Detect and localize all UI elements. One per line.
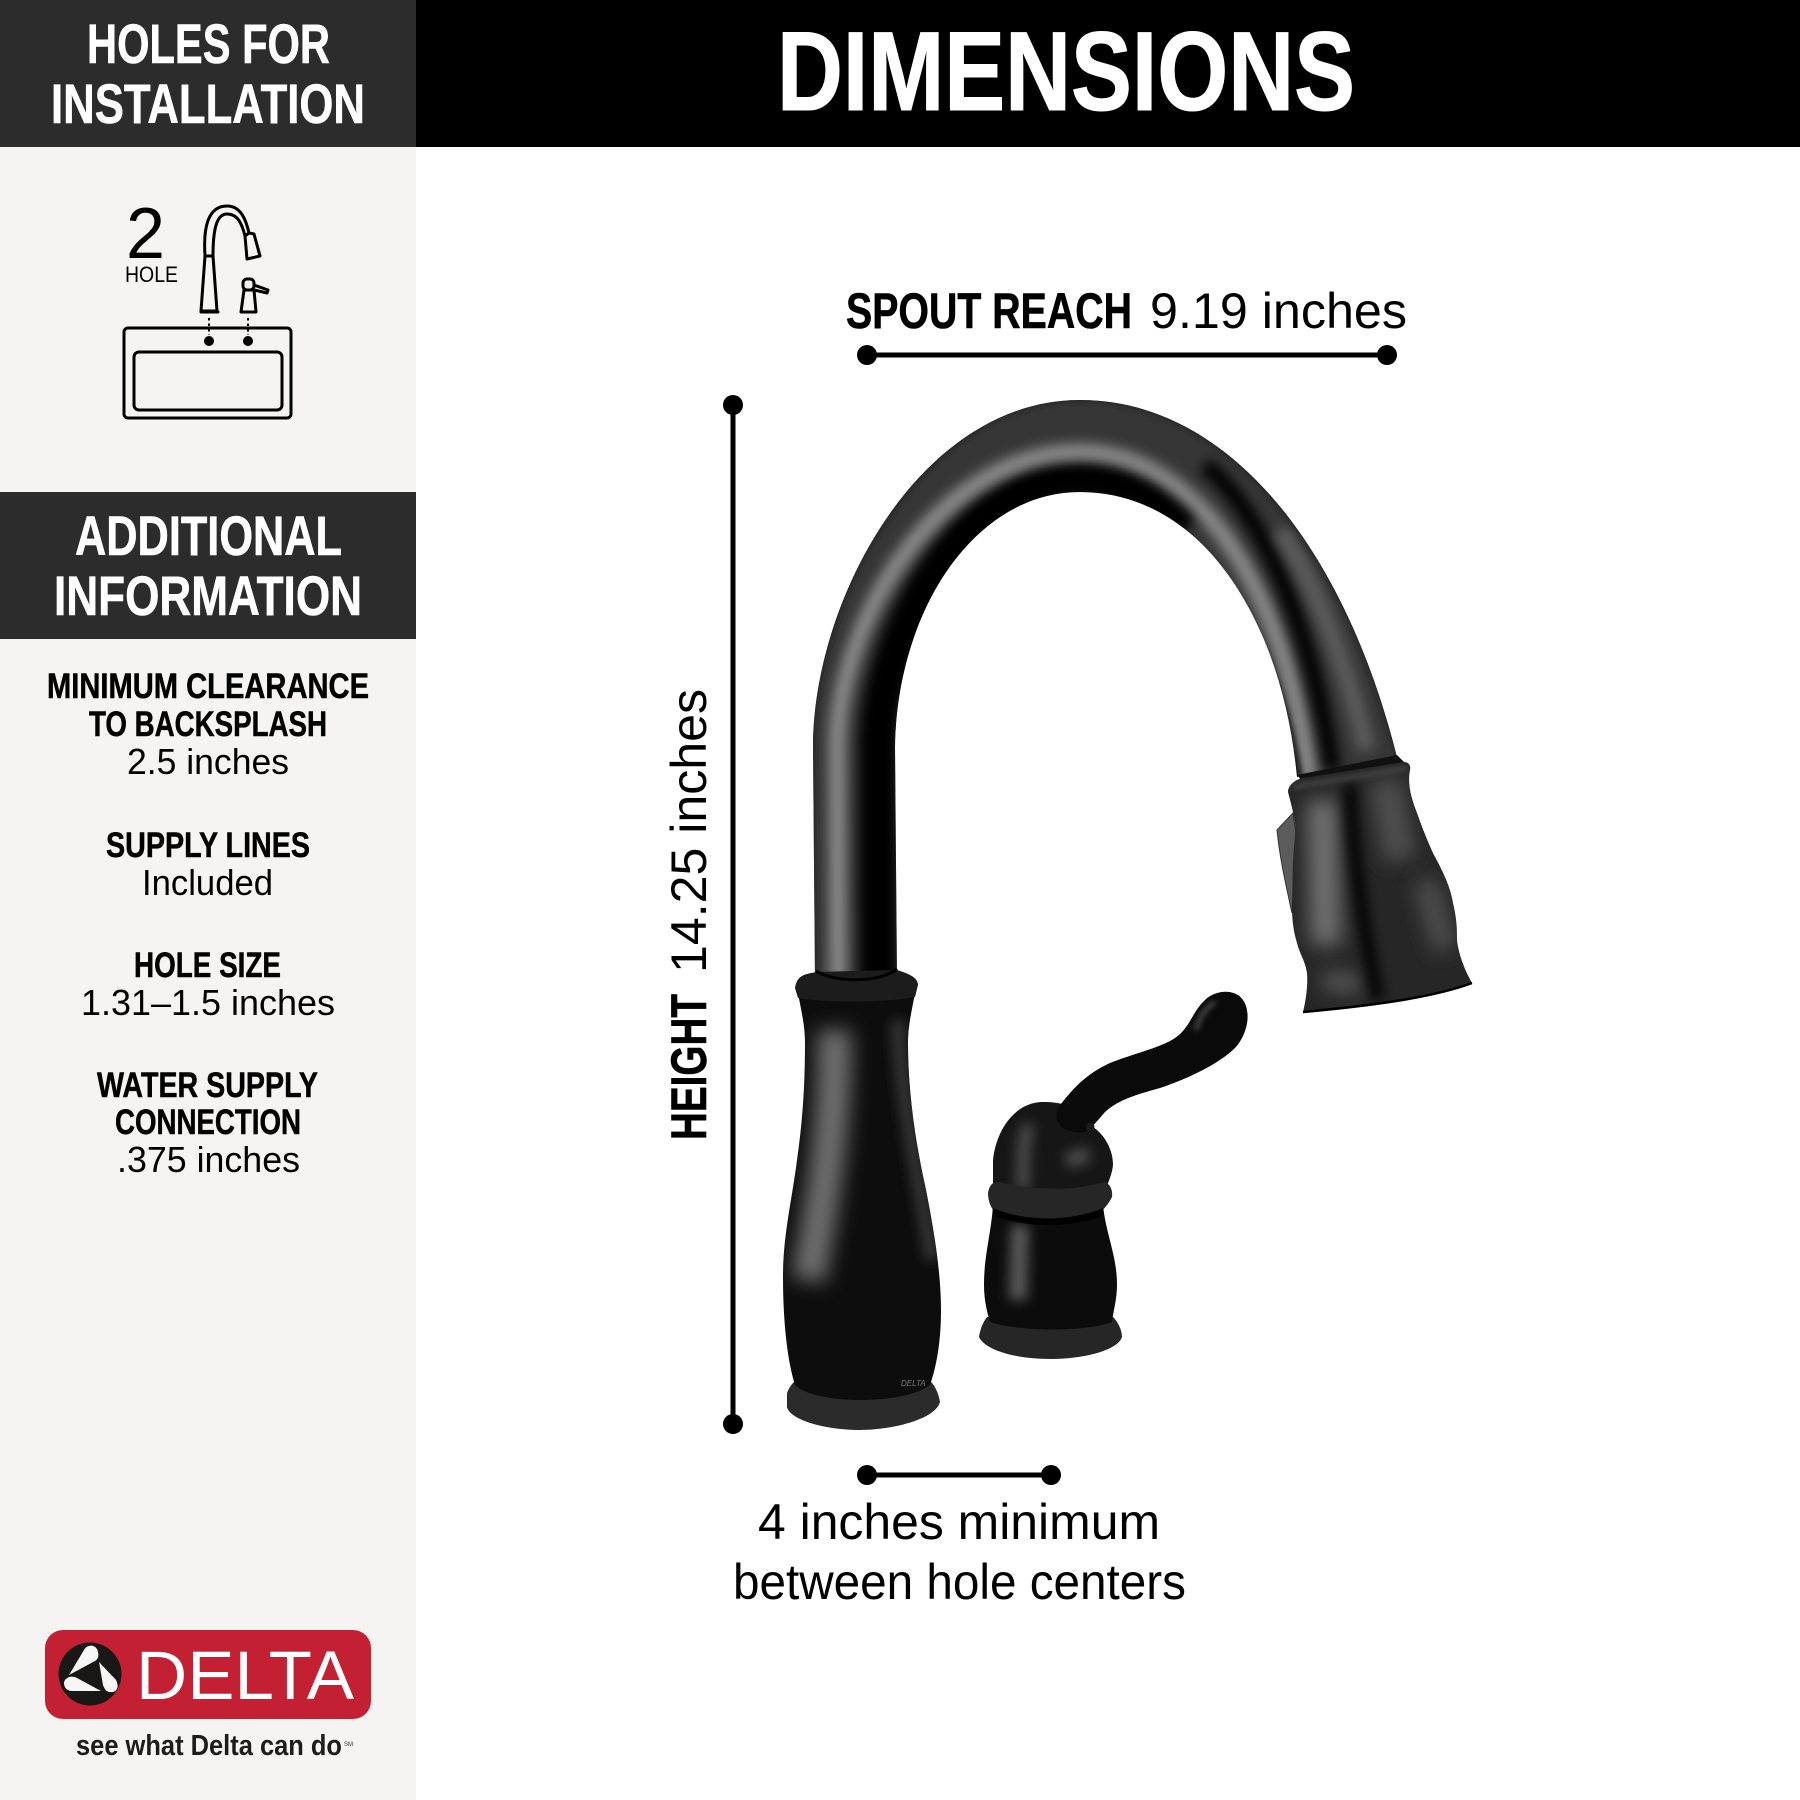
dimension: height: HEIGHT [661,994,717,1140]
logo: delta: SM [344,1742,353,1748]
text block: water supply connection: .375 inches [117,1139,300,1180]
text block: water supply connection: WATER SUPPLY [97,1066,318,1105]
icon: two-hole sink with faucet [124,194,291,418]
faucet base body [783,969,941,1430]
dimension: height [661,395,743,1434]
heading: holes for installation [0,0,416,147]
icon: two-hole sink with faucet: HOLE [125,262,178,287]
logo: delta: see what Delta can do [76,1730,342,1762]
faucet handle [979,992,1248,1359]
dimension: height: 14.25 inches [661,689,717,973]
text block: hole size: 1.31–1.5 inches [81,982,335,1023]
dimension: spout reach: SPOUT REACH [846,283,1132,339]
text block: minimum clearance: 2.5 inches [127,741,289,782]
faucet base body: DELTA [901,1379,926,1388]
text block: water supply connection [97,1066,318,1180]
faucet spray head [1277,755,1472,1012]
text block: supply lines: SUPPLY LINES [106,826,310,865]
text block: water supply connection: CONNECTION [115,1103,301,1142]
faucet spout [811,398,1399,985]
dimension: spout reach: 9.19 inches [1150,283,1407,339]
title bar: dimensions: DIMENSIONS [777,9,1355,134]
text block: minimum clearance: TO BACKSPLASH [89,705,327,744]
text block: hole size [81,946,335,1023]
text block: minimum clearance: MINIMUM CLEARANCE [47,667,369,706]
heading: additional information: ADDITIONAL [75,504,342,567]
text block: minimum clearance [47,667,369,782]
logo: delta [45,1630,371,1762]
logo: delta: DELTA [136,1637,354,1714]
text block: hole size: HOLE SIZE [134,946,281,985]
icon: two-hole sink with faucet: 2 [126,194,165,274]
heading: holes for installation: HOLES FOR [87,12,330,75]
title bar: dimensions [416,0,1800,147]
heading: additional information: INFORMATION [54,564,362,627]
heading: holes for installation: INSTALLATION [51,72,365,135]
dimension: hole spacing [733,1465,1186,1610]
text block: supply lines [106,826,310,903]
text block: supply lines: Included [142,862,273,903]
dimension: spout reach [846,283,1407,365]
heading: additional information [0,492,416,639]
dimension: hole spacing: between hole centers [733,1554,1186,1610]
dimension: hole spacing: 4 inches minimum [758,1494,1160,1550]
sidebar panel [0,0,416,1800]
